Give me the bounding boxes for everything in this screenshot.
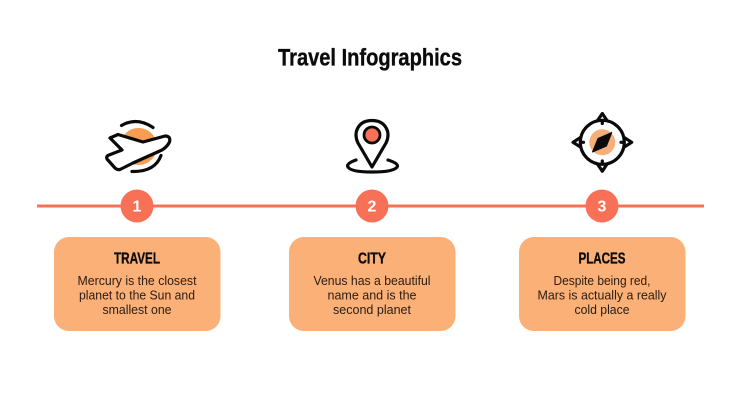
panel: travel: smallest one (102, 303, 172, 317)
panel: places: Mars is actually a really (538, 288, 667, 302)
panel: travel (54, 237, 220, 331)
marker 1: 1 (133, 199, 142, 216)
panel: places: PLACES (578, 250, 626, 268)
panel: places: Despite being red, (554, 274, 650, 288)
panel: places (519, 237, 686, 331)
panel: city: CITY (358, 250, 386, 268)
panel: places: cold place (574, 303, 630, 317)
icon: compass (573, 114, 632, 171)
panel: travel: planet to the Sun and (79, 288, 195, 302)
marker 2: 2 (368, 199, 377, 216)
panel: city: second planet (333, 303, 412, 317)
icon: map pin (348, 120, 398, 172)
panel: city: name and is the (328, 288, 417, 302)
marker 2 (356, 190, 388, 222)
marker 1 (120, 190, 154, 222)
panel: city (289, 237, 456, 331)
title: Travel Infographics (278, 44, 462, 72)
panel: city: Venus has a beautiful (314, 274, 430, 288)
marker 3: 3 (598, 199, 607, 216)
icon: airplane (107, 121, 170, 172)
panel: travel: TRAVEL (114, 250, 160, 268)
timeline line (37, 204, 704, 208)
marker 3 (586, 190, 618, 222)
panel: travel: Mercury is the closest (78, 274, 197, 288)
